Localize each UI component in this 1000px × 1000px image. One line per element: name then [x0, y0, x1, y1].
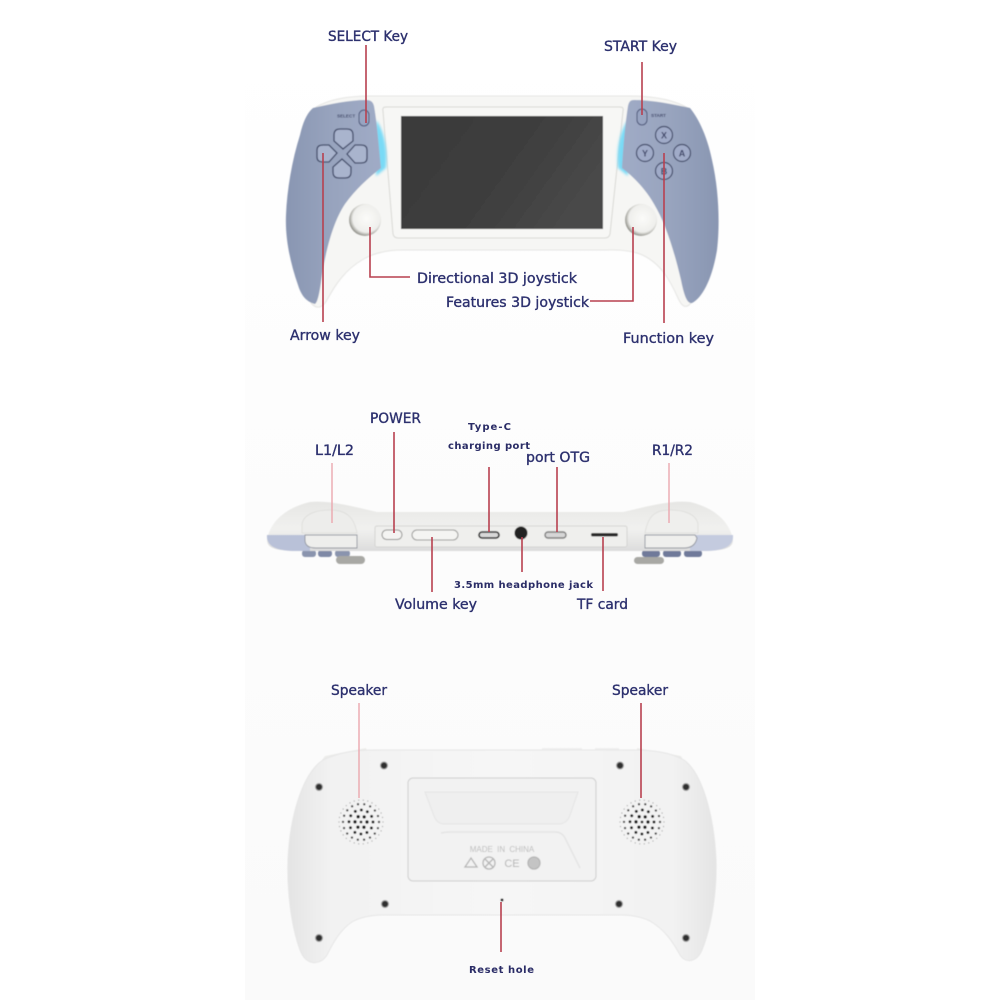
plate lower recess: [441, 832, 580, 868]
label: TF card: TF card: [576, 597, 628, 613]
left blue grip: [286, 100, 381, 304]
regulatory icons: [465, 857, 540, 870]
top callout lines: [323, 45, 664, 323]
label: Arrow key: Arrow key: [290, 328, 360, 344]
left speaker grille: [339, 800, 383, 844]
console body: [311, 96, 717, 307]
arrow key pad: [317, 129, 367, 178]
R2 button: [645, 535, 697, 548]
screen: [401, 116, 603, 229]
right speaker grille: [620, 800, 664, 844]
START small print and button: START: [651, 113, 666, 118]
back view of console: [288, 748, 716, 963]
volume key: [412, 530, 458, 540]
left bottom buttons: [302, 550, 365, 564]
label: Volume key: Volume key: [395, 597, 477, 613]
label: R1/R2: R1/R2: [652, 443, 693, 459]
right bottom buttons: [634, 550, 702, 564]
label: Features 3D joystick: Features 3D joystick: [446, 295, 590, 311]
label: Speaker right: Speaker: [612, 683, 668, 699]
made in china text: MADE IN CHINA: [470, 845, 535, 854]
START small print and button: [637, 109, 666, 125]
label: port OTG: port OTG: [526, 450, 590, 466]
SELECT small print and button: SELECT: [337, 114, 355, 118]
cyan glow right: [617, 120, 628, 176]
R1 button: [645, 510, 698, 533]
reset hole: [500, 898, 504, 902]
label: POWER: POWER: [370, 411, 421, 427]
power button: [382, 530, 402, 540]
OTG port: [545, 532, 566, 538]
bottom callout lines: [359, 703, 641, 952]
regulatory icons: CE: [504, 858, 520, 870]
label: SELECT Key: SELECT Key: [328, 29, 408, 45]
right blue strip: [690, 535, 733, 551]
shoulder buttons: [322, 748, 683, 760]
label: L1/L2: L1/L2: [315, 443, 354, 459]
SELECT small print and button: [337, 110, 369, 126]
Type-C port: [479, 532, 499, 538]
plate upper recess: [425, 792, 578, 824]
headphone jack: [514, 526, 528, 540]
label: Speaker left: Speaker: [331, 683, 387, 699]
battery plate: [408, 778, 596, 881]
front view of console: [286, 96, 719, 307]
left blue strip: [267, 535, 310, 551]
L1 button: [302, 510, 357, 533]
label: START Key: START Key: [604, 39, 677, 55]
label: 3.5mm headphone jack: 3.5mm headphone jack: [454, 580, 593, 591]
back shell: [288, 750, 716, 963]
L2 button: [305, 535, 357, 548]
label: Type-C: Type-C: [468, 422, 511, 433]
middle callout lines: [332, 432, 669, 592]
screws: [316, 762, 690, 942]
edge body: [267, 502, 733, 551]
screen bezel: [383, 107, 623, 238]
right joystick: [625, 204, 657, 236]
label: Function key: Function key: [623, 331, 714, 347]
label: Reset hole: Reset hole: [469, 965, 534, 976]
label: charging port: charging port: [448, 441, 530, 452]
background panel: [245, 40, 755, 1000]
top edge view of console: [267, 502, 733, 564]
left joystick: [349, 204, 381, 236]
function keys X Y A B: [636, 126, 690, 180]
function key letters: B: [661, 166, 668, 176]
port panel: [375, 526, 627, 547]
label: Directional 3D joystick: Directional 3D joystick: [417, 271, 578, 287]
function key letters: Y: [642, 148, 648, 158]
cyan glow left: [376, 120, 387, 176]
function key letters: A: [679, 148, 686, 158]
function key letters: X: [661, 130, 667, 140]
function key letters: [642, 130, 686, 176]
right blue grip: [622, 100, 719, 303]
TF card slot: [591, 533, 618, 536]
